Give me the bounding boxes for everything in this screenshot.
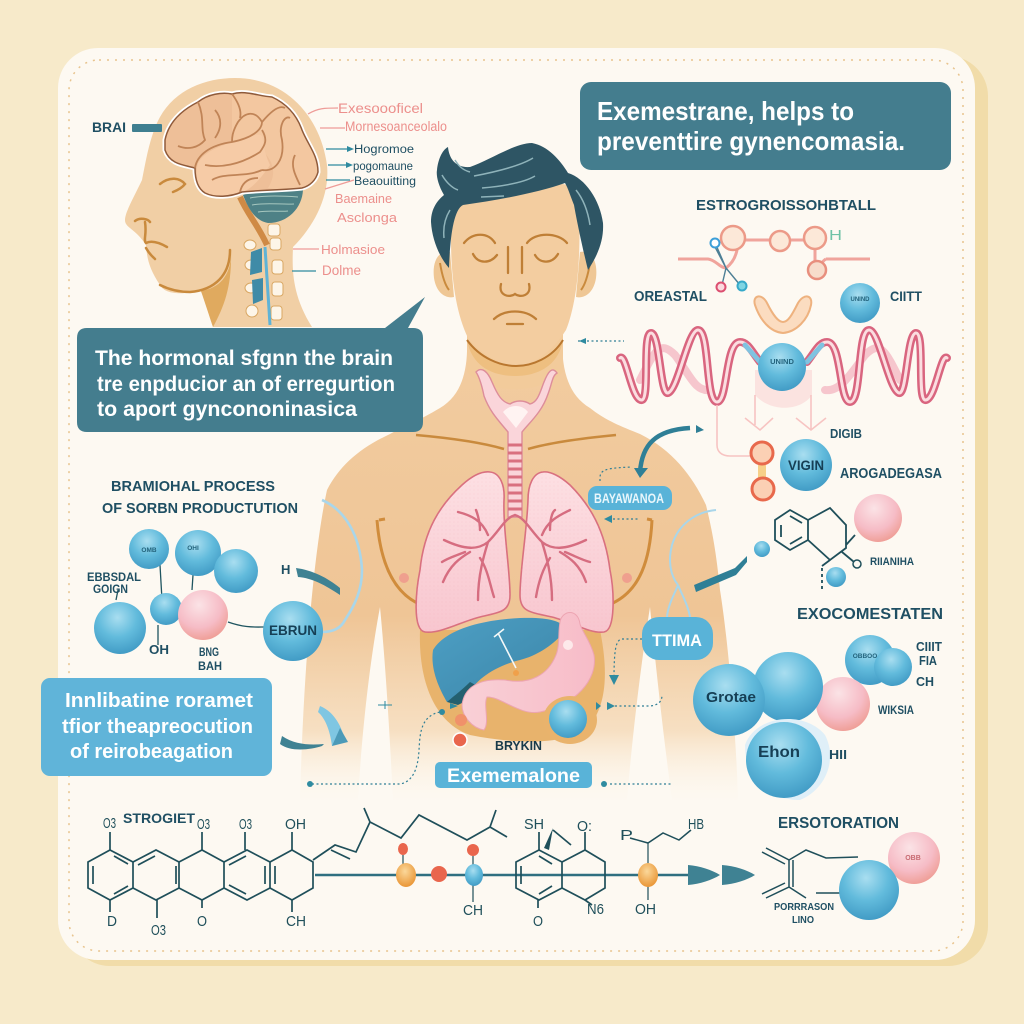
labels: BAH: [198, 659, 222, 673]
nipples: [399, 573, 632, 583]
labels: HII: [829, 747, 847, 762]
brain labels: Baemaine: [335, 191, 392, 206]
spine vertebrae: [244, 224, 283, 320]
left tube: [322, 500, 362, 632]
chain labels: HB: [688, 816, 704, 833]
callout lines: [308, 108, 354, 189]
labels: WIKSIA: [878, 703, 914, 717]
bronchi: [442, 510, 590, 600]
spinal cord: [240, 197, 267, 245]
brain labels: Exesoooficel: [338, 101, 423, 116]
labels: BNG: [199, 645, 219, 659]
pink line neck: [293, 248, 319, 250]
labels: EBBSDAL: [87, 572, 141, 584]
small o: [853, 560, 861, 568]
neck: [467, 325, 563, 389]
callout: inhibit production: Innlibatine roramet: [65, 690, 253, 712]
chain labels: [103, 810, 704, 939]
callout: hormonal signal: tre enpducior an of erregurtion: [97, 372, 395, 396]
small blue spheres: [754, 541, 846, 587]
arrow top right: [640, 428, 690, 472]
labels: DIGIB: [830, 426, 862, 441]
brain: [165, 93, 318, 196]
pink sphere: [854, 494, 902, 542]
left teal wedge: [296, 568, 340, 595]
stomach: [462, 612, 594, 730]
central sphere: [758, 343, 806, 391]
heading: ERSOTORATION: [778, 815, 899, 832]
small arrowheads: [346, 146, 354, 168]
brain labels: Holmasioe: [321, 242, 385, 257]
right chain: [630, 830, 691, 843]
head silhouette: [125, 78, 327, 327]
ears: [434, 252, 596, 297]
callout: hormonal signal: to aport gyncononinasica: [97, 397, 358, 421]
vion sphere: VIGIN: [788, 457, 824, 473]
spheres: [94, 529, 323, 661]
jaw shadow: [467, 340, 563, 376]
face lines: [135, 179, 230, 292]
route end dots: [307, 338, 619, 787]
figure: man body: [300, 340, 738, 800]
liver shadow: [447, 682, 485, 705]
pink sphere: OBB: [905, 855, 921, 862]
brain labels: pogomaune: [353, 161, 413, 173]
skeleton: [762, 848, 858, 898]
hair: [431, 143, 603, 270]
orange halo under sphere: [543, 696, 597, 744]
panel: exocomestaten: [693, 606, 943, 800]
arrowheads: [688, 865, 755, 885]
ear lines: [440, 263, 590, 290]
sphere near stomach: [549, 700, 587, 738]
jaw line: [467, 340, 563, 366]
dotted routes: [312, 341, 672, 784]
chain labels: O3: [103, 815, 116, 832]
chain labels: N6: [587, 901, 604, 918]
label: OREASTAL: [634, 289, 707, 305]
sphere cluster: Ehon: [758, 744, 800, 761]
spheres: OHI: [187, 545, 199, 552]
main axis: [315, 874, 690, 876]
blue sphere: [839, 860, 899, 920]
tracheal rings: [508, 445, 522, 509]
sphere top right: UNIND: [850, 297, 870, 303]
TTIMA box: TTIMA: [652, 632, 702, 650]
panel: biochemical process: [87, 478, 323, 673]
chain labels: O: [533, 913, 543, 930]
chain labels: OH: [635, 901, 656, 918]
side chain: [313, 808, 507, 860]
panel: bottom molecule chain: [88, 808, 755, 939]
labels: AROGADEGASA: [840, 466, 942, 482]
brain outline: [165, 93, 318, 196]
abdomen markers: [453, 670, 519, 747]
panel: restoration: [762, 815, 940, 926]
chain labels: P: [620, 827, 633, 844]
labels: CH: [916, 674, 934, 689]
abdomen halo: [420, 630, 605, 742]
labels: [829, 639, 942, 762]
brain labels: [321, 101, 447, 278]
connectors: [116, 565, 265, 645]
face: [451, 182, 580, 366]
abdomen label: BRYKIN: [495, 738, 542, 753]
neck shadow: [201, 250, 231, 327]
TTIMA box: [642, 617, 713, 660]
spheres: OMB: [141, 547, 157, 554]
teal callouts: [292, 149, 350, 271]
pale glow below sphere: [755, 370, 812, 408]
larynx highlight: [503, 406, 528, 428]
chain labels: O3: [239, 816, 252, 833]
sphere cluster: [693, 635, 912, 800]
chain labels: D: [107, 913, 117, 930]
heading: BRAMIOHAL PROCESS: [111, 478, 275, 495]
callout: inhibit production: of reirobeagation: [70, 741, 233, 763]
panel: head profile with brain: [92, 78, 447, 327]
chain labels: O: [197, 913, 207, 930]
callout: hormonal signal: The hormonal sfgnn the brain: [95, 346, 393, 370]
sphere cluster: OBBOO: [853, 653, 877, 660]
card dashed border: [69, 60, 963, 951]
upper lobe: [232, 93, 318, 190]
right curve tube: [667, 510, 716, 617]
temporal lobe: [197, 135, 270, 196]
five fused rings: [88, 832, 313, 918]
chain labels: CH: [286, 913, 306, 930]
wedge: [544, 828, 553, 850]
title box: preventtire gynencomasia.: [597, 126, 905, 156]
panel: restoration: LINO: [792, 914, 814, 926]
title box: Exemestrane, helps to: [597, 96, 854, 126]
labels: FIA: [919, 653, 938, 668]
card shadow: [70, 56, 988, 966]
pill: [588, 486, 672, 510]
exemestane pill: Exememalone: [447, 766, 580, 787]
label: PORRRASON: [774, 901, 834, 913]
central sphere: UNIND: [770, 357, 794, 366]
curved blue arrow: [318, 706, 345, 746]
teal wedge: [694, 556, 747, 592]
labels: OH: [149, 642, 169, 657]
chain labels: OH: [285, 816, 306, 833]
panel: estrogen receptor: [620, 197, 947, 590]
exemestane pill: [435, 762, 592, 788]
u shaped receptor: [754, 296, 811, 333]
receptor connector arrows: [717, 395, 826, 456]
chain labels: O3: [197, 816, 210, 833]
hair highlights: [442, 158, 590, 238]
liver pointer: [494, 629, 516, 668]
chain labels: CH: [463, 902, 483, 919]
arrowhead: [332, 728, 348, 746]
man head: [431, 143, 603, 389]
brain labels: Beaouitting: [354, 176, 416, 188]
spheres: EBRUN: [269, 622, 317, 638]
label: RIIANIHA: [870, 556, 914, 568]
sphere cluster: Grotae: [706, 689, 756, 706]
hex molecule: [775, 508, 855, 590]
body arrows: [280, 425, 747, 750]
lungs: [416, 472, 613, 632]
card panel: [58, 48, 975, 960]
callout: hormonal signal: [77, 297, 425, 432]
lung texture: [416, 472, 613, 632]
brain labels: Asclonga: [337, 210, 398, 225]
vertebrae discs: [250, 248, 263, 304]
panel: biochemical process: OF SORBN PRODUCTUTION: [102, 500, 298, 517]
brain labels: Dolme: [322, 262, 361, 278]
chain labels: SH: [524, 816, 544, 833]
pink sphere: [888, 832, 940, 884]
callout: inhibit production: [41, 678, 272, 776]
pill: BAYAWANOA: [594, 490, 664, 506]
brain label: BRAI: [92, 120, 126, 135]
top molecule: H: [829, 227, 842, 244]
heading: ESTROGROISSOHBTALL: [696, 197, 876, 214]
title box: [580, 82, 951, 170]
brain labels: Hogromoe: [354, 144, 414, 156]
brain label bar: [132, 124, 162, 132]
nodes: [396, 843, 658, 902]
spinal line: [265, 247, 270, 325]
brain labels: Mornesoanceolalo: [345, 119, 447, 134]
lower arrow tail: [280, 736, 324, 750]
labels: [830, 426, 942, 482]
callout: inhibit production: tfior theapreocution: [62, 716, 253, 738]
trachea and larynx: [476, 370, 557, 517]
vion sphere: [780, 439, 832, 491]
facial features: [464, 235, 567, 324]
labels: H: [281, 562, 290, 577]
labels: [87, 562, 290, 673]
right rings: [516, 830, 605, 908]
chest lines: [377, 519, 652, 603]
stomach highlight: [563, 640, 573, 650]
sphere top right: [840, 283, 880, 323]
label: CIITT: [890, 288, 922, 304]
chain labels: O3: [151, 922, 166, 939]
collar bones: [416, 435, 616, 449]
orange dumbbell: [751, 442, 774, 500]
labels: GOIGN: [93, 584, 128, 596]
wave: [620, 330, 947, 402]
labels: CIIIT: [916, 639, 942, 654]
top molecule: [678, 226, 870, 292]
liver: [432, 618, 566, 705]
chain labels: STROGIET: [123, 810, 195, 826]
chain labels: O:: [577, 818, 592, 835]
heading: EXOCOMESTATEN: [797, 606, 943, 623]
cerebellum: [243, 188, 303, 223]
